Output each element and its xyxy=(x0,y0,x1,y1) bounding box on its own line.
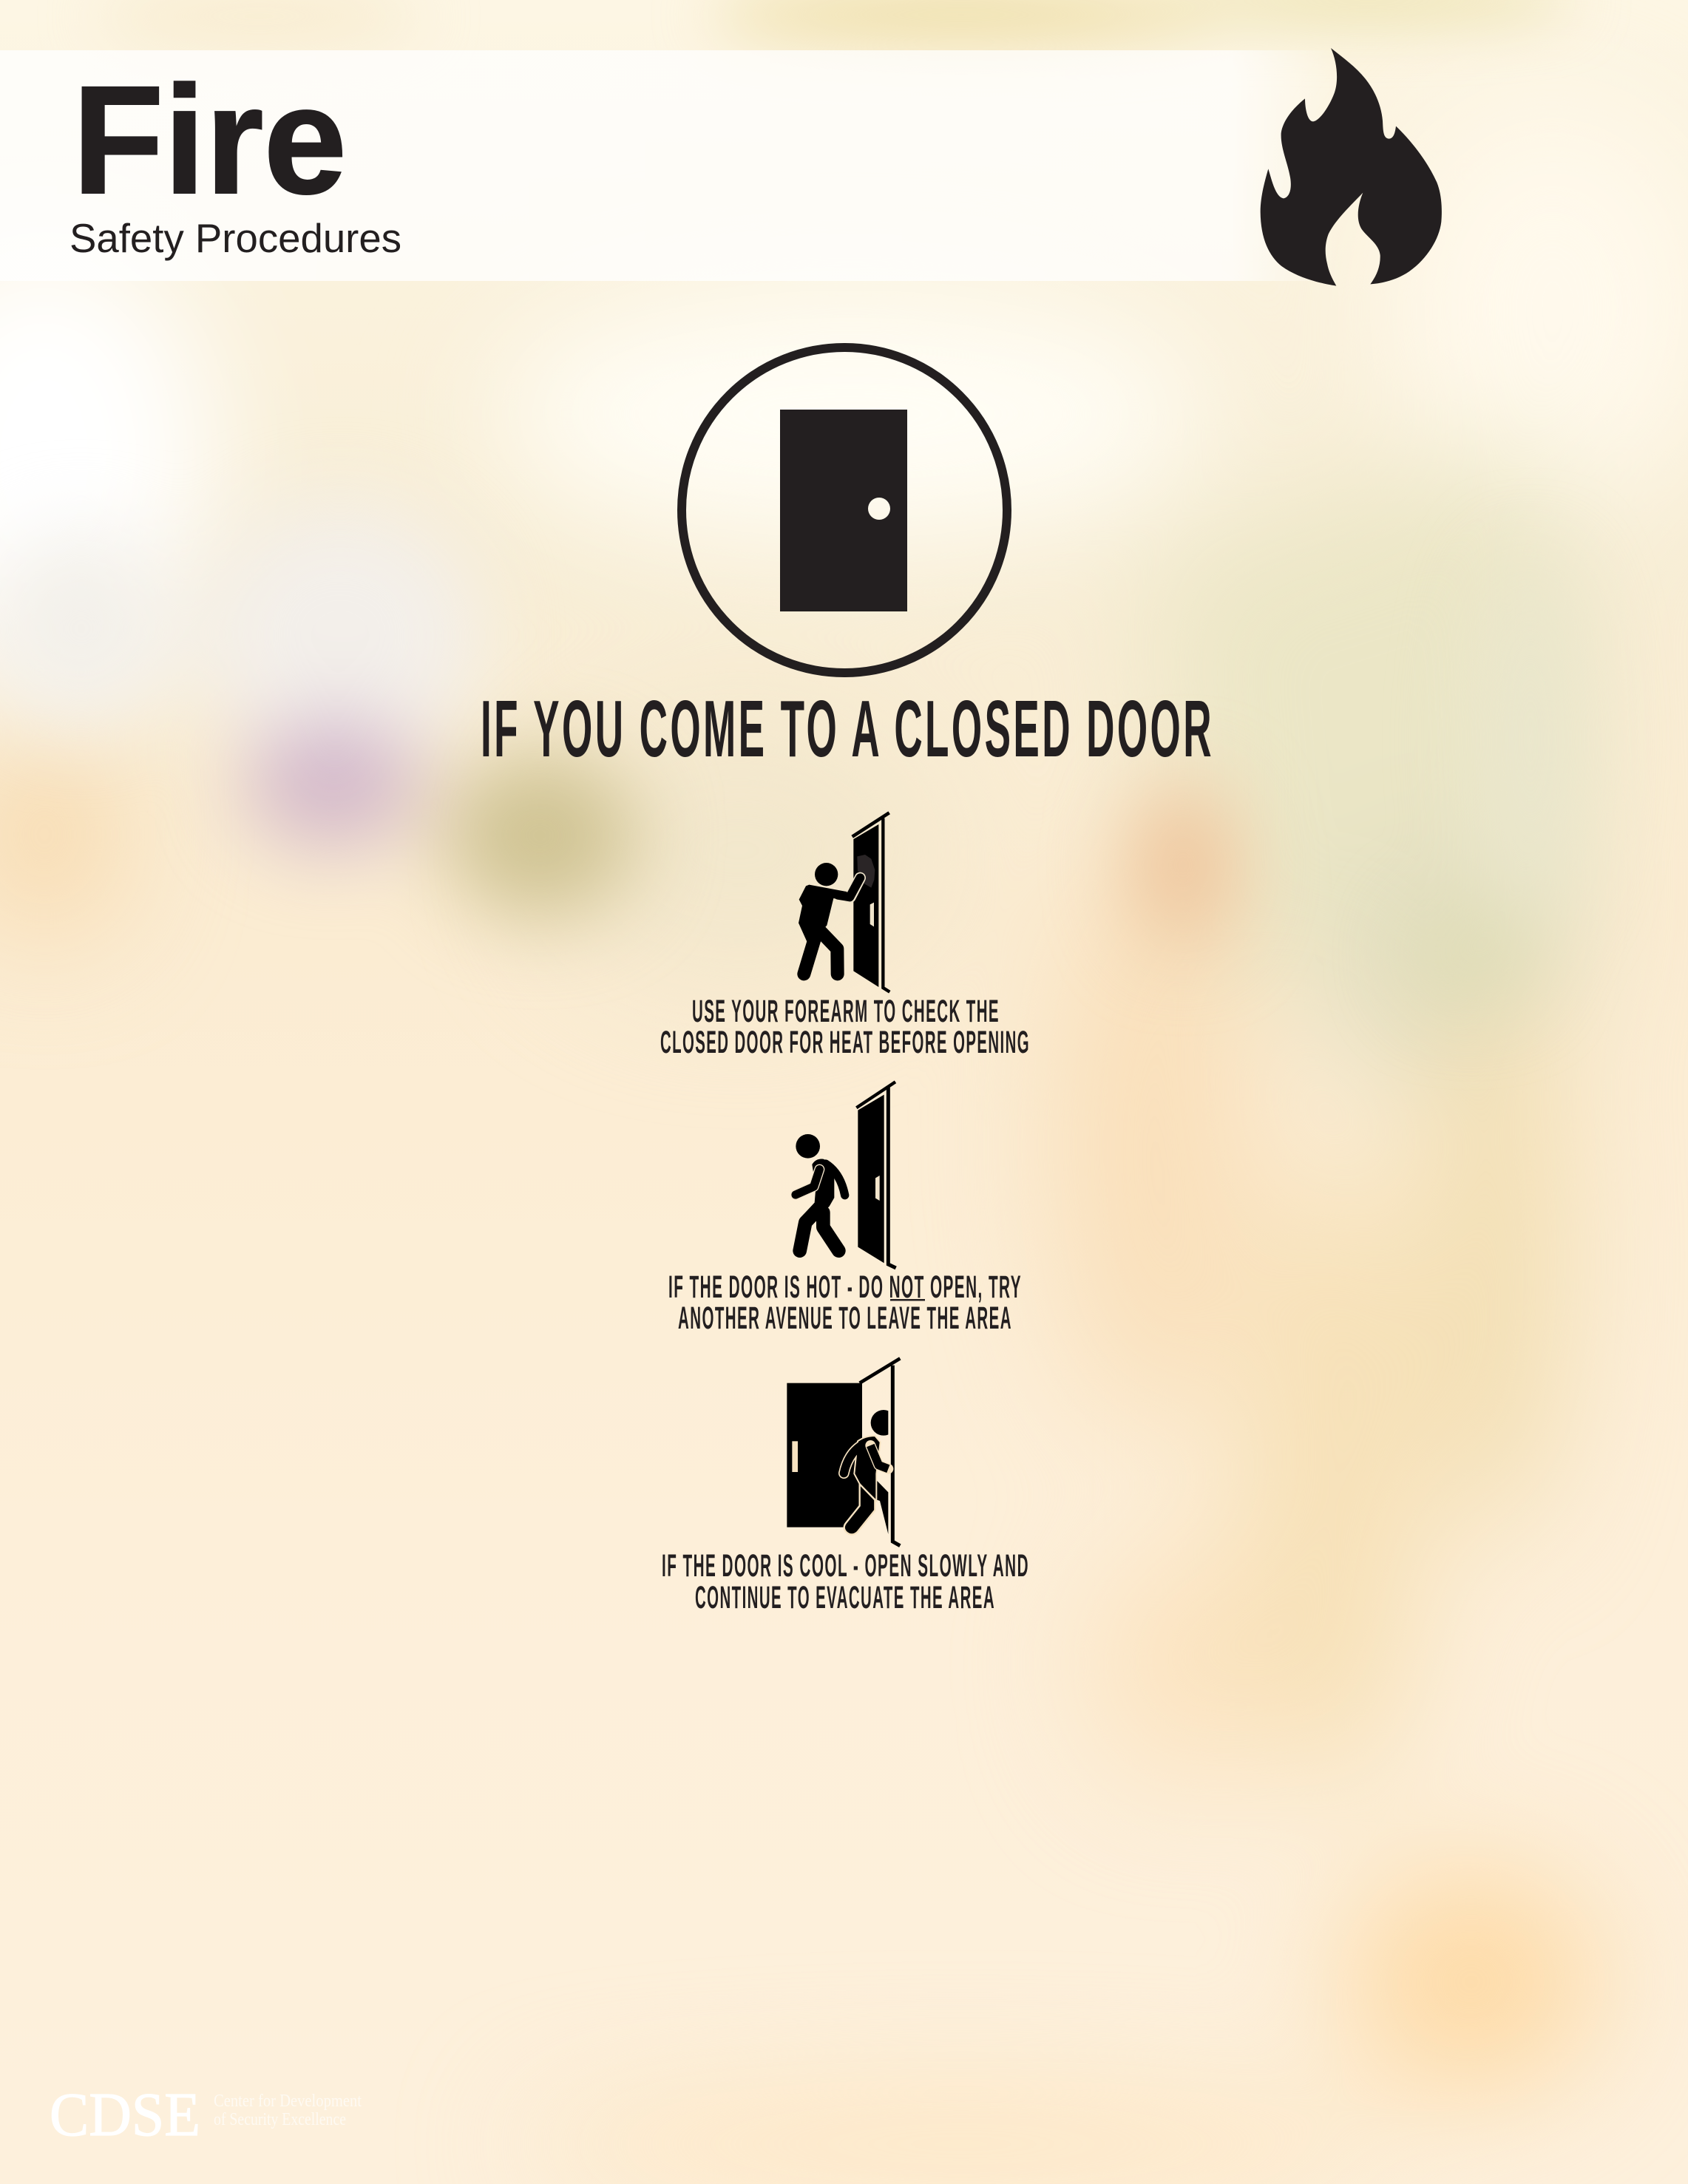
text: IF THE DOOR IS HOT - DO NOT OPEN, TRY xyxy=(668,1269,1022,1305)
title: Fire: Fire xyxy=(72,55,347,226)
icon: person walking away from hot door xyxy=(796,1082,896,1268)
instruction 2 xyxy=(668,1269,1022,1336)
icon: flame xyxy=(1261,48,1442,286)
instruction 1 xyxy=(660,994,1030,1060)
text: ANOTHER AVENUE TO LEAVE THE AREA xyxy=(678,1300,1012,1336)
icon: person checking door with forearm xyxy=(799,813,889,992)
subtitle: Safety Procedures: Safety Procedures xyxy=(70,215,401,261)
instruction 3: CONTINUE TO EVACUATE THE AREA xyxy=(695,1580,995,1615)
text: CLOSED DOOR FOR HEAT BEFORE OPENING xyxy=(660,1025,1030,1060)
icon: person leaving through cool door xyxy=(787,1358,900,1546)
instruction 3 xyxy=(662,1548,1029,1615)
logo: CDSE: CDSE xyxy=(50,2080,200,2149)
logo: CDSE: Center for Development xyxy=(214,2092,362,2111)
text: IF THE DOOR IS COOL - OPEN SLOWLY AND xyxy=(662,1548,1029,1584)
instruction 1: USE YOUR FOREARM TO CHECK THE xyxy=(692,994,1000,1029)
icon: closed door in circle xyxy=(682,347,1007,673)
title banner xyxy=(0,50,1338,281)
logo: CDSE xyxy=(50,2080,362,2149)
logo: CDSE: of Security Excellence xyxy=(214,2110,346,2129)
